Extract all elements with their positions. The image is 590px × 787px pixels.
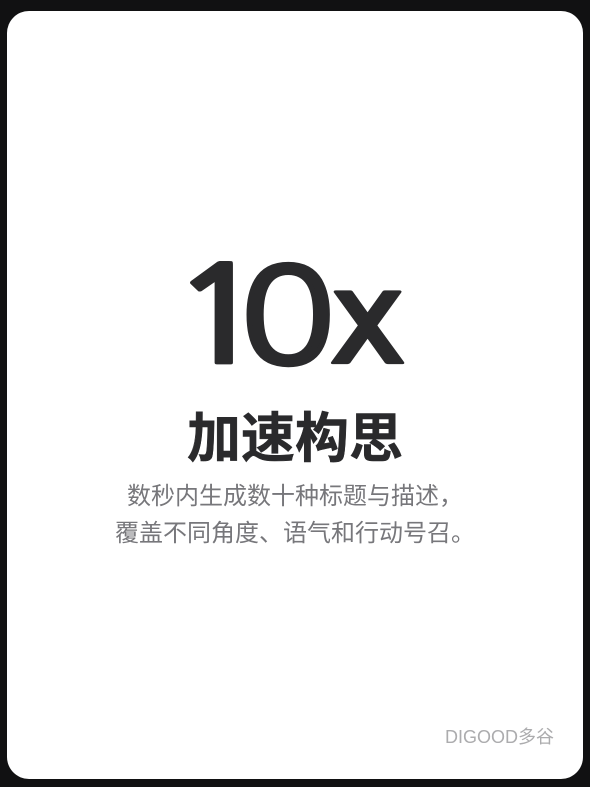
big number: 10x: 0 bbox=[240, 250, 336, 384]
heading: 加速构思 bbox=[187, 408, 403, 468]
description text bbox=[115, 483, 475, 547]
big number: 10x: 1 bbox=[168, 251, 272, 385]
description text: 覆盖不同角度、语气和行动号召。 bbox=[115, 520, 475, 547]
big number: 10x: x bbox=[330, 253, 405, 384]
description text: 数秒内生成数十种标题与描述， bbox=[127, 483, 463, 510]
watermark: brand: DIGOOD多谷 bbox=[445, 727, 554, 747]
